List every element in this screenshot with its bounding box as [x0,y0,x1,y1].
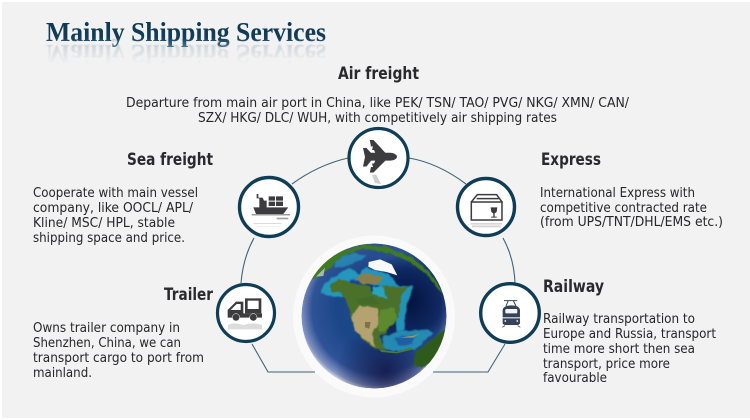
sea freight description [33,186,198,246]
trailer description: Shenzhen, China, we can [33,336,181,351]
railway description: Railway transportation to [543,312,695,327]
title with reflection: Mainly Shipping Services [46,17,326,47]
railway description: favourable [543,371,607,386]
trailer description: mainland. [33,366,92,381]
railway description: Europe and Russia, transport [543,327,716,342]
icon: parcel box [458,178,514,236]
air freight description: Departure from main air port in China, like PEK/ TSN/ TAO/ PVG/ NKG/ XMN/ CAN/ [126,96,630,111]
South America [413,329,446,368]
express description [540,186,723,230]
Caribbean islands [378,348,413,353]
air freight description [126,96,630,126]
railway description [543,312,716,386]
sea freight description: company, like OOCL/ APL/ [33,201,194,216]
air freight heading: Air freight [338,64,419,83]
express description: competitive contracted rate [540,201,707,216]
North America [330,279,408,351]
Arctic islands [355,273,383,285]
icon: train [481,284,539,342]
express heading: Express [541,150,601,169]
railway description: transport, price more [543,357,670,372]
trailer description [33,321,204,381]
express description: (from UPS/TNT/DHL/EMS etc.) [540,215,723,230]
icon: cargo ship [240,178,298,236]
continental shelf [321,268,360,298]
railway description: time more short then sea [543,342,695,357]
sea freight description: shipping space and price. [33,231,185,246]
sea freight description: Kline/ MSC/ HPL, stable [33,216,175,231]
Western plains [352,305,379,348]
Top rim land [312,245,443,293]
title with reflection [46,17,326,69]
sea freight heading: Sea freight [127,150,213,169]
express description: International Express with [540,186,695,201]
trailer description: transport cargo to port from [33,351,204,366]
Hudson Bay [372,287,387,299]
icon: truck [218,284,274,342]
Greenland [368,259,397,275]
railway heading: Railway [543,277,604,296]
connector ring [241,158,515,372]
sea freight description: Cooperate with main vessel [33,186,198,201]
trailer description: Owns trailer company in [33,321,180,336]
icon: air plane [349,128,408,188]
title with reflection: Mainly Shipping Services [46,39,326,69]
globe [302,244,446,388]
air freight description: SZX/ HKG/ DLC/ WUH, with competitively air shipping rates [198,111,557,126]
trailer heading: Trailer [164,285,214,304]
